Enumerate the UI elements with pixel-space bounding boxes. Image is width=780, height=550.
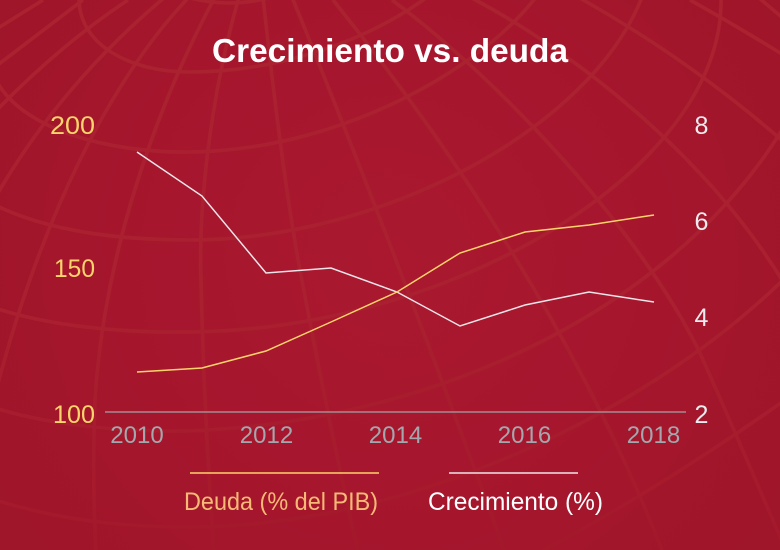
title: Crecimiento vs. deuda: [212, 32, 569, 69]
line: growth: [137, 152, 654, 326]
left axis labels: debt: 200: [50, 112, 95, 140]
right axis labels: growth: 2: [694, 401, 708, 429]
left axis labels: debt: [50, 112, 95, 429]
x axis year labels: 2012: [240, 422, 293, 449]
left axis labels: debt: 100: [53, 401, 95, 429]
left axis labels: debt: 150: [54, 255, 95, 283]
right axis labels: growth: 8: [694, 112, 708, 140]
x axis year labels: 2016: [498, 422, 551, 449]
x axis year labels: 2018: [627, 422, 680, 449]
right axis labels: growth: 6: [694, 208, 708, 236]
right axis labels: growth: [694, 112, 708, 429]
x axis year labels: 2010: [110, 422, 164, 449]
x axis year labels: [110, 422, 680, 449]
legend: growth: Crecimiento (%): [428, 488, 603, 516]
x axis year labels: 2014: [369, 422, 422, 449]
line: debt: [137, 215, 654, 372]
right axis labels: growth: 4: [694, 304, 708, 332]
legend: debt: Deuda (% del PIB): [184, 488, 378, 516]
x axis baseline: [105, 411, 686, 413]
